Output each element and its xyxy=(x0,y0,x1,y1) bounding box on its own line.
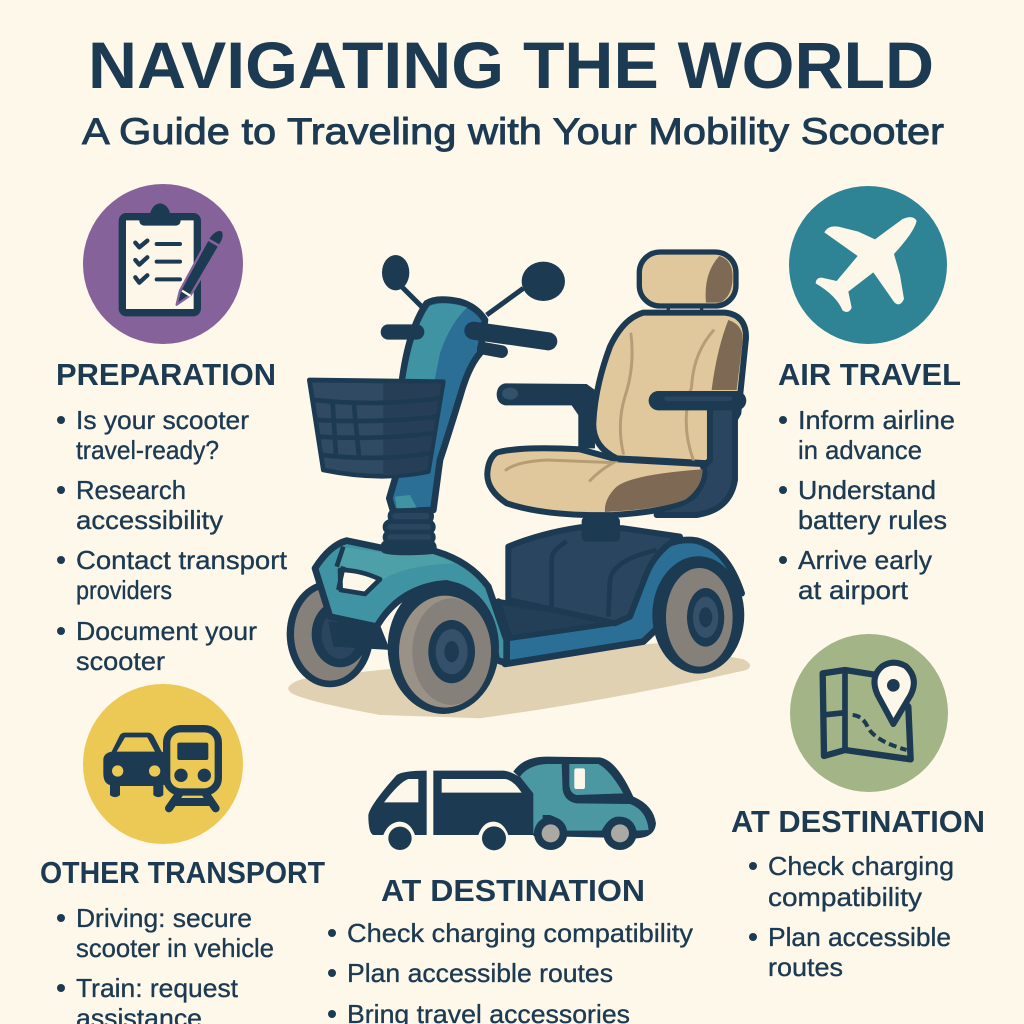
left armrest xyxy=(497,383,595,448)
list: preparation xyxy=(57,405,288,676)
icon: clipboard checklist xyxy=(83,184,243,344)
icon: airplane xyxy=(789,186,947,344)
list: at destination right: routes xyxy=(768,952,843,982)
front left wheel xyxy=(287,581,373,687)
list: at destination center: Plan accessible routes xyxy=(347,958,613,988)
icon: car and train xyxy=(83,684,243,844)
list: air travel: at airport xyxy=(798,575,909,605)
basket xyxy=(309,380,443,476)
list: other transport: scooter in vehicle xyxy=(76,933,274,963)
list: at destination right: compatibility xyxy=(768,882,922,912)
floor board xyxy=(498,602,617,638)
backrest xyxy=(593,313,746,463)
list: at destination center xyxy=(328,918,693,1024)
heading: preparation: PREPARATION xyxy=(56,357,276,392)
list: air travel: Inform airline xyxy=(798,405,955,435)
list: air travel: Arrive early xyxy=(798,545,932,575)
list: at destination center: Check charging compatibility xyxy=(347,918,693,948)
list: air travel: Understand xyxy=(798,475,936,505)
rear wheel xyxy=(652,556,744,674)
list: preparation: Contact transport xyxy=(76,545,288,575)
panel: preparation xyxy=(56,357,288,676)
list: air travel: in advance xyxy=(798,435,922,465)
battery box xyxy=(508,527,680,623)
list: preparation: providers xyxy=(76,575,172,605)
subtitle: A Guide to Traveling with Your Mobility Scooter xyxy=(82,111,944,152)
title: NAVIGATING THE WORLD xyxy=(88,28,934,102)
front body xyxy=(315,541,507,663)
list: at destination right xyxy=(749,851,954,982)
ground shadow xyxy=(288,643,750,718)
list: at destination right: Check charging xyxy=(768,851,954,881)
list: preparation: travel-ready? xyxy=(76,435,219,465)
panel: other transport xyxy=(40,855,325,1024)
icon: map with pin xyxy=(790,634,948,792)
list: preparation: Is your scooter xyxy=(76,405,249,435)
armrest post xyxy=(657,407,735,515)
heading: other transport: OTHER TRANSPORT xyxy=(40,855,325,890)
list: preparation: Document your xyxy=(76,616,257,646)
panel: at destination (center) xyxy=(328,873,693,1024)
neck spring xyxy=(383,511,434,555)
list: air travel: battery rules xyxy=(798,505,947,535)
list: air travel xyxy=(779,405,955,605)
mirrors and handlebar xyxy=(382,255,565,352)
icon: truck and van xyxy=(368,757,656,850)
cushion xyxy=(487,448,704,515)
list: preparation: Research xyxy=(76,475,186,505)
list: at destination right: Plan accessible xyxy=(768,922,951,952)
heading: air travel: AIR TRAVEL xyxy=(778,357,961,392)
scooter illustration xyxy=(287,252,750,718)
panel: air travel xyxy=(778,357,961,605)
heading: at destination right: AT DESTINATION xyxy=(731,804,985,839)
list: other transport: Train: request xyxy=(76,973,239,1003)
seat xyxy=(487,252,746,542)
list: preparation: accessibility xyxy=(76,505,223,535)
list: other transport xyxy=(57,903,274,1024)
rear body and fender xyxy=(498,540,742,664)
list: other transport: Driving: secure xyxy=(76,903,252,933)
heading: at destination center: AT DESTINATION xyxy=(381,873,645,908)
panel: at destination (right) xyxy=(731,804,985,982)
headrest xyxy=(668,305,702,311)
right armrest xyxy=(658,372,737,430)
steering column xyxy=(389,300,485,512)
front right wheel xyxy=(388,581,499,714)
list: preparation: scooter xyxy=(76,646,165,676)
